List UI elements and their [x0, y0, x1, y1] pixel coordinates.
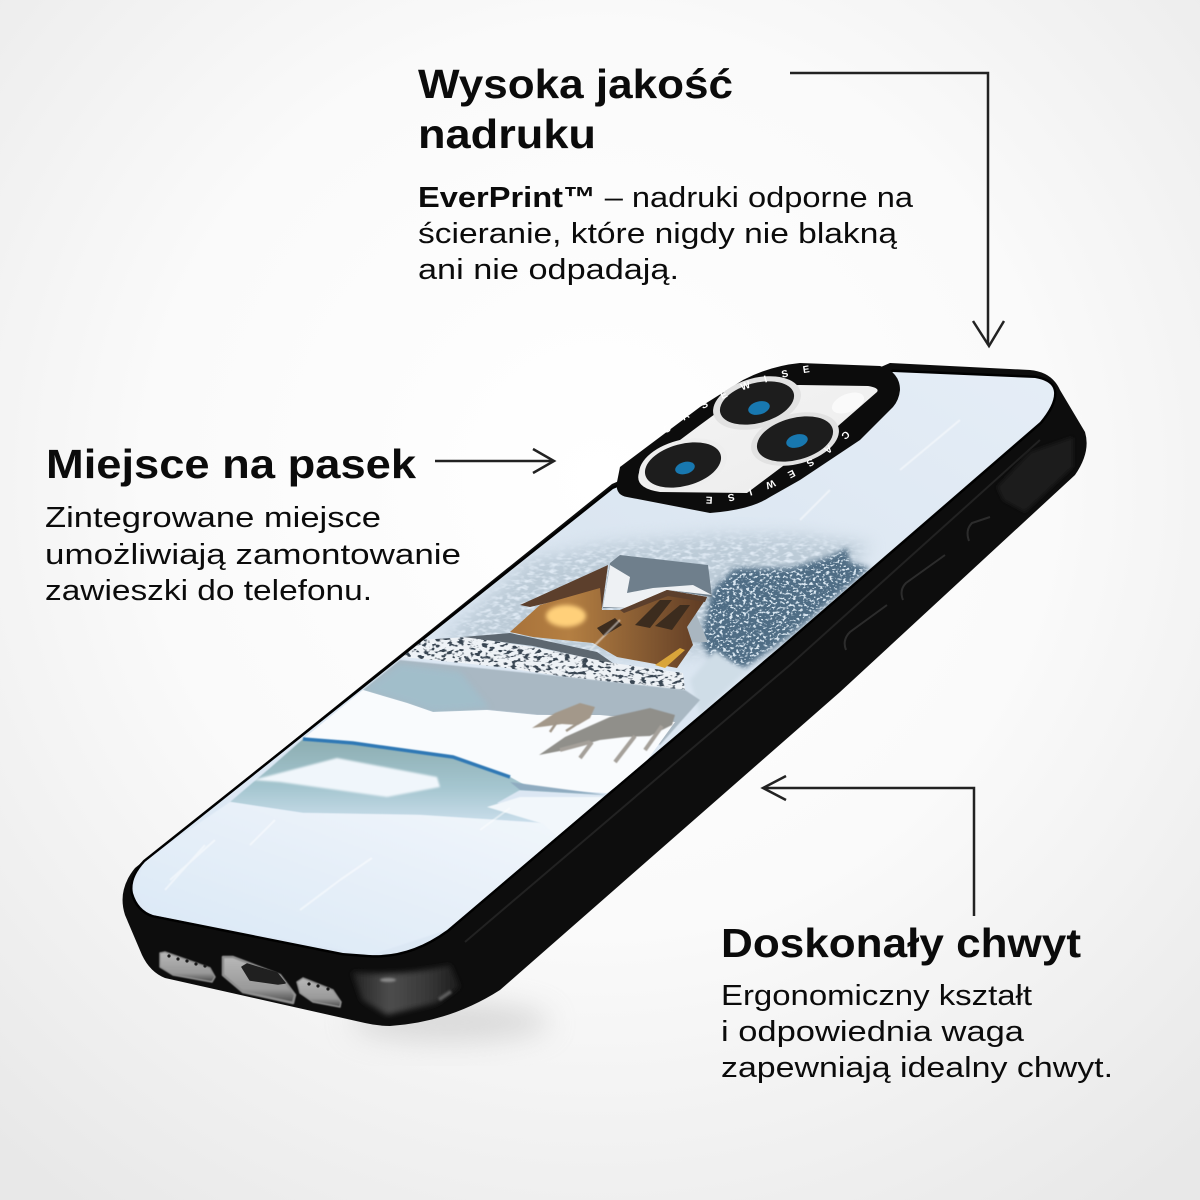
heading: print quality: Wysoka jakość: [418, 61, 733, 107]
forest foot snow: [690, 650, 745, 715]
phone case: [123, 363, 1087, 1026]
text: strap slot: Zintegrowane miejsce: [45, 502, 381, 534]
printed winter scene: [132, 372, 1054, 956]
heading: print quality: [418, 61, 733, 157]
text: grip: i odpowiednia waga: [721, 1016, 1025, 1048]
text: grip: [721, 980, 1113, 1084]
upper corner strap slot: [997, 437, 1073, 512]
side groove: [465, 440, 1040, 942]
heading: print quality: nadruku: [418, 111, 596, 157]
fir forest: [700, 548, 870, 668]
arrow: print quality: [790, 73, 1004, 346]
cabin glow: [546, 605, 586, 627]
lens right: [745, 403, 845, 475]
frozen water: [363, 660, 700, 745]
snow bank with stones: [403, 637, 685, 690]
text: print quality: ścieranie, które nigdy nie blakną: [418, 218, 898, 250]
pond: [230, 739, 607, 823]
flash: [829, 388, 867, 418]
text: grip: zapewniają idealny chwyt.: [721, 1052, 1113, 1084]
callout: strap slot: [45, 441, 554, 607]
snowfield: [303, 690, 675, 793]
lens top: [707, 367, 807, 439]
lens left: [633, 429, 733, 501]
rain streaks: [165, 420, 960, 910]
cabin walls: [510, 588, 707, 668]
camera window: [638, 385, 878, 493]
corner highlights: [380, 978, 452, 1001]
arrow: grip: [763, 776, 974, 916]
snow pocket: [487, 797, 603, 840]
wolf small: [532, 703, 595, 732]
cabin annex: [687, 614, 708, 642]
callout: print quality: [418, 61, 1004, 346]
sky: [132, 372, 1054, 956]
cabin left roof: [520, 565, 608, 608]
text: grip: Ergonomiczny kształt: [721, 980, 1032, 1012]
far shore streak: [510, 782, 607, 795]
cabin snow patches: [603, 565, 712, 608]
camera ring: [617, 363, 900, 513]
phone shadow: [350, 1002, 550, 1042]
text: strap slot: umożliwiają zamontowanie: [45, 539, 461, 571]
ring brand bottom: CASEWISE: [706, 432, 850, 504]
screen rim: [132, 372, 1054, 955]
ring brand top: CASEWISE: [666, 365, 810, 432]
side buttons: [845, 517, 990, 650]
cabin foundation: [463, 633, 613, 663]
text: print quality: ani nie odpadają.: [418, 254, 679, 286]
heading: strap slot: Miejsce na pasek: [46, 441, 416, 487]
arrow: strap slot: [435, 449, 554, 473]
bottom corner gloss: [352, 965, 460, 1015]
heading: grip: Doskonały chwyt: [721, 920, 1081, 966]
case body: [123, 363, 1087, 1026]
cabin roof edge: [620, 590, 707, 613]
mist mountains: [440, 535, 870, 660]
port: charging: [223, 957, 295, 1003]
cabin lower light: [655, 648, 685, 668]
cabin: [463, 555, 712, 668]
cabin grey roof: [603, 555, 712, 608]
text: print quality: EverPrint™ – nadruki odporne na: [418, 182, 914, 214]
callout: grip: [721, 776, 1113, 1084]
ice patch: [253, 758, 440, 797]
text: print quality: [418, 182, 914, 286]
foreground snow: [133, 802, 560, 955]
text: strap slot: zawieszki do telefonu.: [45, 575, 372, 607]
wolf large: [539, 708, 675, 762]
text: strap slot: [45, 502, 461, 607]
port: left speaker: [160, 952, 215, 982]
port: right speaker: [297, 978, 341, 1007]
cabin windows: [597, 600, 690, 636]
pond shoreline: [303, 739, 510, 777]
camera module: [616, 363, 900, 513]
lake tint: [364, 674, 460, 712]
